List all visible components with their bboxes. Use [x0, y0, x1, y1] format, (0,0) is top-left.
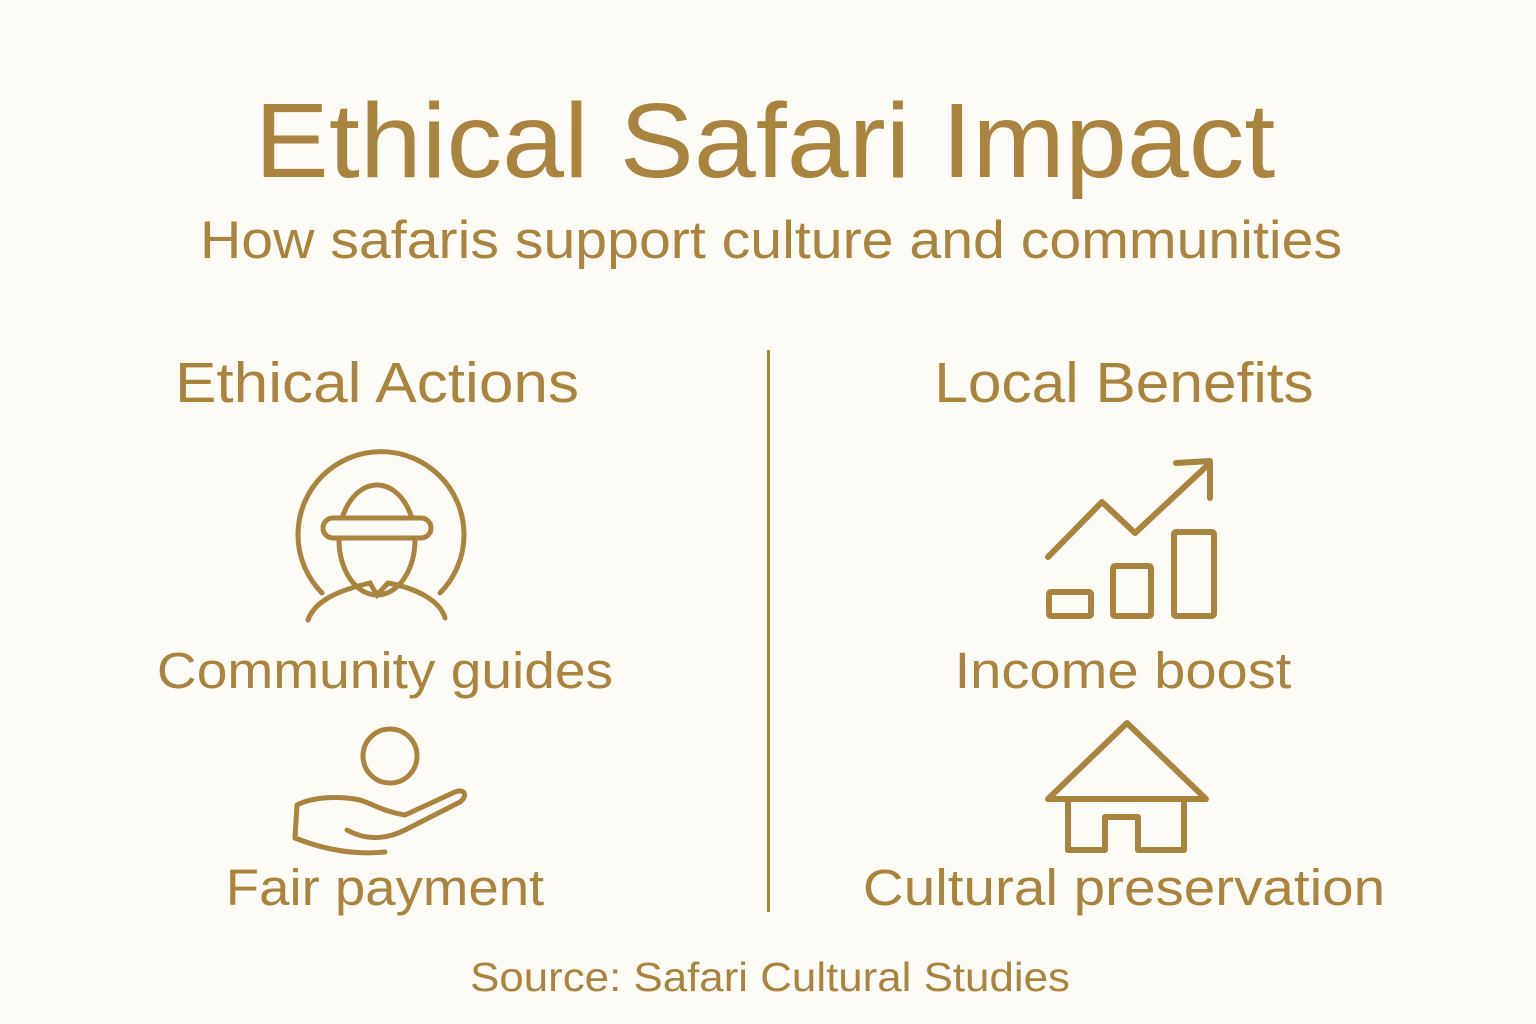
- icon: house: [1045, 720, 1209, 853]
- label: Cultural preservation: Cultural preservation: [863, 859, 1385, 916]
- divider: [767, 350, 770, 912]
- icon: community guide: [296, 449, 466, 622]
- label: Fair payment: Fair payment: [226, 859, 544, 916]
- heading: Ethical Actions: Ethical Actions: [175, 351, 579, 415]
- title: Ethical Safari Impact: [255, 82, 1275, 200]
- heading: Local Benefits: Local Benefits: [934, 351, 1314, 415]
- icon: hand with coin: [292, 726, 468, 856]
- subtitle: How safaris support culture and communities: [200, 211, 1342, 270]
- label: Income boost: Income boost: [955, 642, 1291, 699]
- label: Community guides: Community guides: [157, 642, 613, 699]
- source: Source: Safari Cultural Studies: [470, 954, 1070, 1000]
- icon: income chart: [1045, 458, 1217, 619]
